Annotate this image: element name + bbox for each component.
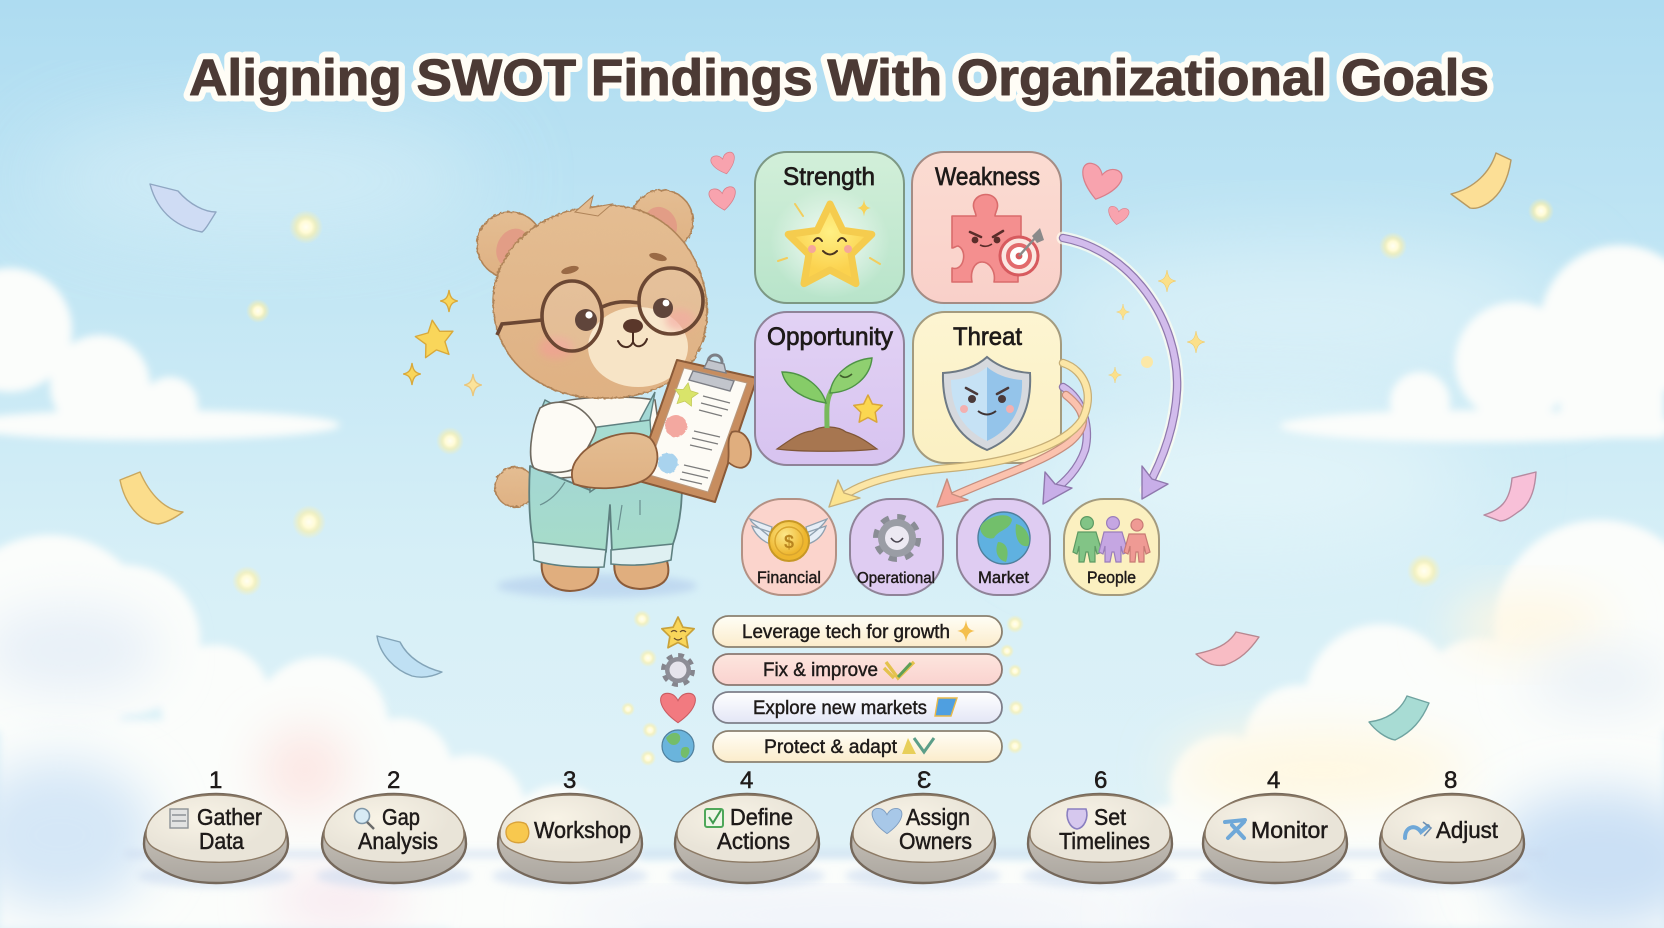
- step 5: assign owners: [851, 767, 995, 883]
- action row: explore markets: Explore new markets: [753, 697, 927, 719]
- title: Aligning SWOT Findings With Organizational Goals: [189, 49, 1489, 106]
- icon: smiling star: [778, 200, 880, 284]
- step 1: gather data: Gather: [197, 804, 262, 830]
- step 5: assign owners: Owners: [899, 828, 972, 854]
- overalls: [529, 448, 682, 552]
- decorative stars beside bear: [403, 290, 482, 396]
- arrow: threat to operational: [937, 395, 1083, 507]
- label: Operational: [857, 570, 935, 587]
- icon: winged coin: $: [784, 532, 794, 552]
- step 2: gap analysis: Analysis: [358, 828, 438, 854]
- nose and mouth: [618, 319, 647, 347]
- step 8: adjust: Adjust: [1436, 817, 1499, 843]
- title: Aligning SWOT Findings With Organizational Goals: [189, 49, 1489, 106]
- label: Weakness: [935, 163, 1040, 191]
- arm: [572, 433, 657, 488]
- action row: fix and improve: Fix & improve: [763, 659, 878, 681]
- step 5: assign owners: Ɛ: [917, 767, 932, 794]
- label: Strength: [783, 163, 875, 191]
- head: [493, 206, 707, 398]
- step 4: define actions: Actions: [717, 828, 790, 854]
- eyes: [575, 298, 673, 331]
- label: Opportunity: [767, 323, 893, 351]
- SWOT tile: weakness: [912, 152, 1061, 303]
- goal tile: people: [1064, 499, 1159, 595]
- cloud: bottom band: [420, 858, 1260, 928]
- soft sky patches: [30, 120, 1560, 550]
- cloud tints: [0, 595, 1664, 928]
- cloud: middle left: [0, 268, 340, 440]
- step 6: set timelines: Timelines: [1059, 828, 1150, 854]
- arrow: weakness to people: [1063, 238, 1177, 499]
- step 6: set timelines: 6: [1094, 767, 1107, 794]
- decorative hearts: [708, 151, 1130, 226]
- icon: three people: [1073, 517, 1150, 562]
- clipboard clip: [689, 355, 734, 391]
- bear mascot: [477, 190, 757, 598]
- step 2: gap analysis: Gap: [382, 804, 420, 830]
- step 7: monitor: 4: [1267, 767, 1280, 794]
- step 4: define actions: [675, 767, 819, 883]
- step 4: define actions: Define: [730, 804, 793, 830]
- action row: explore markets: [661, 692, 1002, 723]
- goal tile: operational: [850, 499, 943, 595]
- step 8: adjust: [1380, 767, 1524, 883]
- label: Threat: [953, 323, 1022, 351]
- step 6: set timelines: [1028, 767, 1172, 883]
- step 6: set timelines: Set: [1094, 804, 1127, 830]
- overalls pocket: [540, 482, 640, 530]
- step 8: adjust: 8: [1444, 767, 1457, 794]
- icon: puzzle piece with target: [952, 194, 1044, 282]
- sparkles near arrows: [1109, 270, 1205, 383]
- action row: protect and adapt: [662, 730, 1002, 762]
- cloud: middle right: [1280, 245, 1664, 442]
- ears: [477, 190, 693, 278]
- step 1: gather data: Data: [199, 828, 244, 854]
- muzzle: [588, 307, 688, 387]
- cloud: bottom right: [1120, 520, 1664, 928]
- step 7: monitor: Monitor: [1251, 817, 1328, 843]
- torso shirt: [535, 397, 665, 480]
- step 1: gather data: [144, 767, 288, 883]
- step 3: workshop: Workshop: [534, 817, 631, 843]
- action row: fix and improve: [664, 654, 1002, 685]
- step 2: gap analysis: [322, 767, 466, 883]
- cheeks: [539, 309, 695, 359]
- bib straps: [540, 392, 655, 448]
- paw on clipboard: [728, 431, 751, 468]
- step 1: gather data: 1: [209, 767, 222, 794]
- label: Financial: [757, 568, 821, 587]
- step 4: define actions: 4: [740, 767, 753, 794]
- feet: [542, 558, 668, 591]
- cloud: bottom left: [0, 535, 640, 928]
- arrow: threat to financial: [829, 363, 1088, 507]
- icon: globe: [978, 512, 1030, 564]
- action row: protect and adapt: Protect & adapt: [764, 736, 898, 758]
- SWOT tile: strength: [755, 152, 904, 303]
- sleeve: [531, 402, 596, 472]
- action row: leverage tech: [662, 616, 1002, 648]
- tuft: [575, 196, 612, 216]
- step 2: gap analysis: 2: [387, 767, 400, 794]
- step 5: assign owners: Assign: [906, 804, 970, 830]
- eyebrows: [560, 251, 668, 276]
- glowing lights: [232, 198, 1554, 596]
- action list: [661, 616, 1002, 762]
- step 7: monitor: [1203, 767, 1347, 883]
- icon: gear: [876, 517, 918, 559]
- icon: sprout with star: [777, 358, 882, 451]
- ground shadow: [497, 574, 697, 598]
- label: People: [1087, 568, 1136, 587]
- list glow dots: [621, 610, 1024, 766]
- SWOT tile: threat: [913, 312, 1061, 463]
- goal tile: financial: [742, 499, 836, 595]
- shadow band under stones: [125, 850, 1545, 888]
- clipboard: [635, 355, 757, 502]
- label: Market: [978, 568, 1029, 587]
- floating paper confetti: [120, 153, 1536, 740]
- arrow: threat to market: [1043, 387, 1087, 504]
- goal tile: market: [957, 499, 1050, 595]
- tail: [495, 467, 535, 507]
- step 3: workshop: [498, 767, 642, 883]
- glasses: [497, 268, 703, 351]
- step 3: workshop: 3: [563, 767, 576, 794]
- cuffs: [533, 542, 673, 567]
- icon: shield: [943, 357, 1030, 450]
- SWOT tile: opportunity: [755, 312, 904, 465]
- action row: leverage tech: Leverage tech for growth: [742, 621, 950, 643]
